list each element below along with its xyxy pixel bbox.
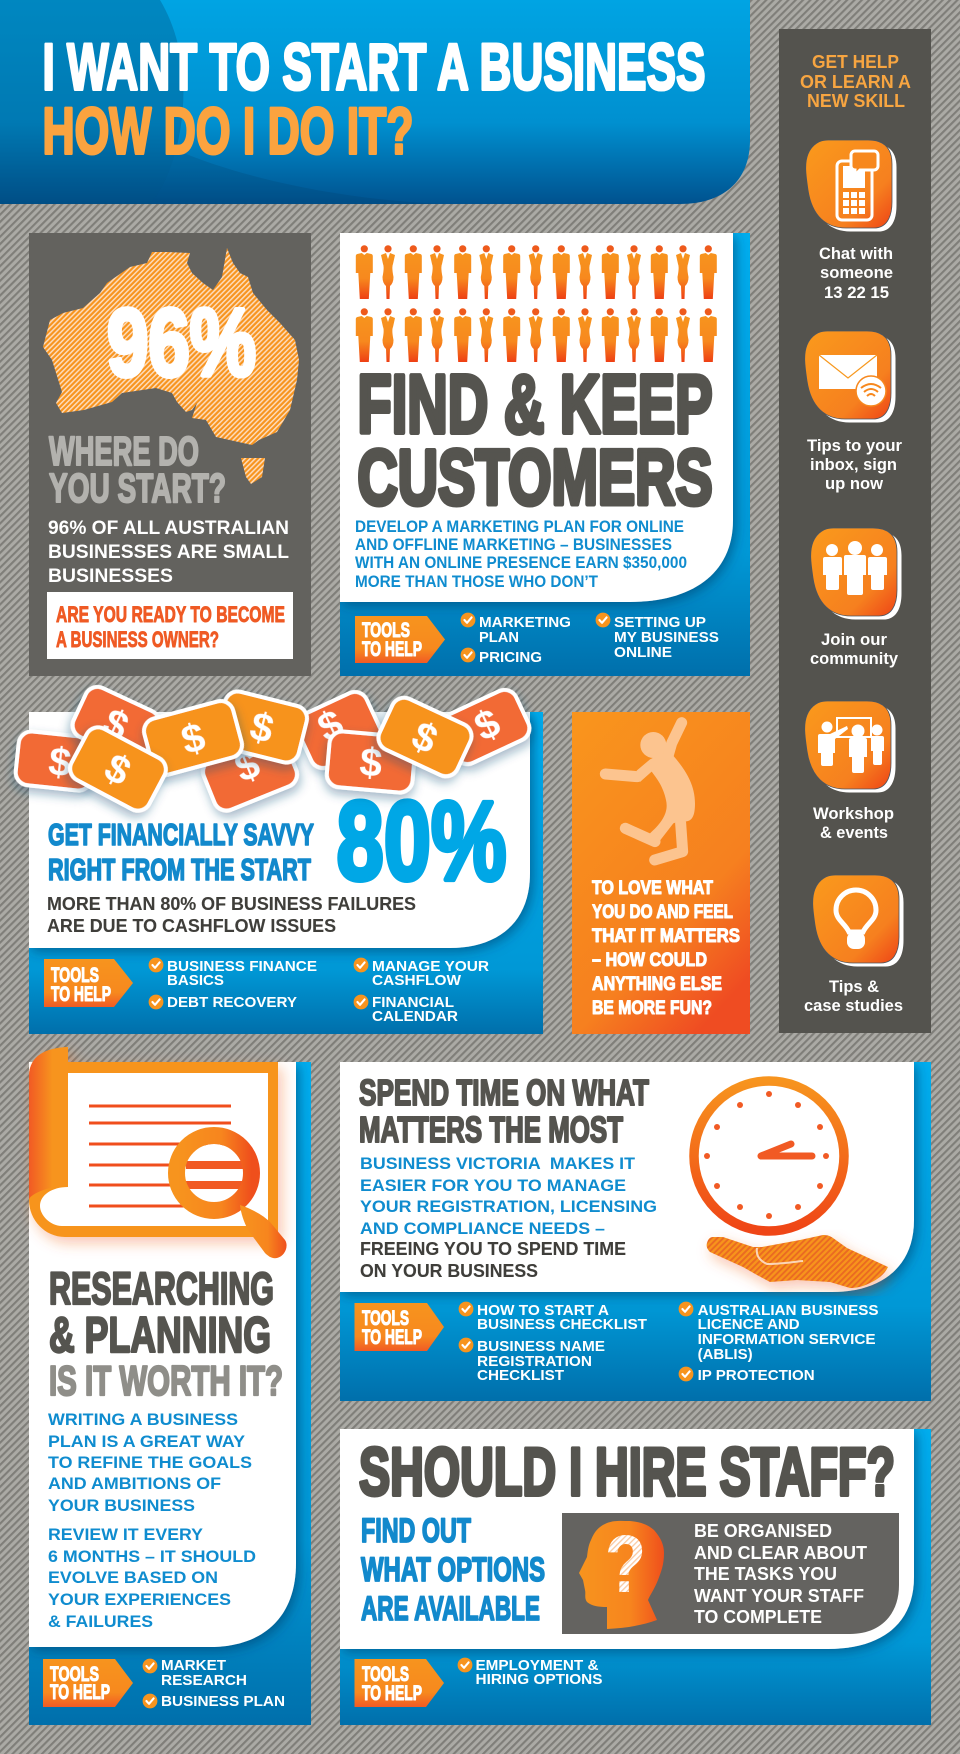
callout: ready to become a business owner: A BUSINESS OWNER? xyxy=(56,627,219,652)
icon: phone chat xyxy=(806,140,896,232)
tools list xyxy=(461,613,719,666)
icon: dollar bills: $ xyxy=(177,715,210,763)
tools list: BASICS xyxy=(167,972,224,989)
title line 2: HOW DO I DO IT? xyxy=(42,94,414,168)
callout: ready to become a business owner: ARE YOU READY TO BECOME xyxy=(56,602,285,627)
text: business victoria: FREEING YOU TO SPEND TIME xyxy=(360,1238,626,1259)
text: marketing plan xyxy=(355,517,687,591)
text: business victoria: EASIER FOR YOU TO MANAGE xyxy=(360,1176,626,1195)
tools list: SETTING UP xyxy=(614,614,706,631)
label: join our community xyxy=(810,630,899,668)
heading: find out what options xyxy=(361,1512,545,1628)
label: tips and case studies: case studies xyxy=(804,996,903,1015)
heading: where do you start: YOU START? xyxy=(49,465,226,511)
text: business victoria: YOUR REGISTRATION, LICENSING xyxy=(360,1197,657,1216)
heading: where do you start xyxy=(49,428,226,511)
tools to help badge xyxy=(44,959,133,1007)
label: workshop and events: & events xyxy=(820,823,888,842)
heading: spend time xyxy=(359,1072,649,1150)
tools list: REGISTRATION xyxy=(477,1353,592,1370)
icon: dollar bills: $ xyxy=(358,740,384,786)
label: tips to your inbox: inbox, sign xyxy=(810,455,897,474)
icon: email newsletter xyxy=(805,331,896,422)
sidebar: get help or learn a new skill xyxy=(779,29,931,1033)
label: workshop and events: Workshop xyxy=(813,804,894,823)
tools list: EMPLOYMENT & xyxy=(476,1657,599,1674)
icon: document scroll with magnifier xyxy=(29,1047,287,1258)
tools list xyxy=(149,958,489,1025)
tools list: ONLINE xyxy=(614,644,672,661)
text: writing a business plan: & FAILURES xyxy=(48,1612,153,1631)
text: marketing plan: AND OFFLINE MARKETING – BUSINESSES xyxy=(355,535,672,554)
text: business victoria: BUSINESS VICTORIA MAKES IT xyxy=(360,1154,636,1173)
text: marketing plan: MORE THAN THOSE WHO DON’T xyxy=(355,572,599,591)
header banner xyxy=(0,0,750,204)
text: cashflow issues: MORE THAN 80% OF BUSINESS FAILURES xyxy=(47,893,416,914)
callout: be organised xyxy=(562,1513,899,1634)
icon: dollar bills: $ xyxy=(47,739,73,786)
icon: open hand xyxy=(707,1235,888,1288)
people icons xyxy=(356,245,717,362)
tools list: BUSINESS PLAN xyxy=(161,1693,285,1710)
tools list: BUSINESS NAME xyxy=(477,1338,605,1355)
tools to help badge xyxy=(355,616,445,663)
heading: researching and planning xyxy=(49,1263,283,1404)
text: writing a business plan: YOUR BUSINESS xyxy=(48,1496,195,1515)
tools list: CHECKLIST xyxy=(477,1367,564,1384)
tools list xyxy=(459,1302,879,1384)
heading: researching and planning: & PLANNING xyxy=(49,1307,271,1363)
text: small business statistic: 96% OF ALL AUSTRALIAN xyxy=(48,518,289,539)
tools list: (ABLIS) xyxy=(698,1346,753,1363)
heading: financially savvy: RIGHT FROM THE START xyxy=(48,852,311,887)
label: tips to your inbox: Tips to your xyxy=(807,436,902,455)
tools list: HIRING OPTIONS xyxy=(476,1671,602,1688)
sidebar heading xyxy=(800,52,911,111)
text: cashflow issues: ARE DUE TO CASHFLOW ISSUES xyxy=(47,915,336,936)
tools to help badge: TOOLS xyxy=(362,1663,409,1686)
label: chat with someone: 13 22 15 xyxy=(824,283,889,302)
icon: dollar bills: $ xyxy=(405,713,444,763)
text: writing a business plan: YOUR EXPERIENCES xyxy=(48,1590,231,1609)
text: be organised: WANT YOUR STAFF xyxy=(694,1585,864,1606)
panel: researching and planning xyxy=(29,1047,311,1725)
icon: light bulb xyxy=(813,875,904,966)
label: tips and case studies: Tips & xyxy=(829,977,879,996)
text: writing a business plan: EVOLVE BASED ON xyxy=(48,1568,218,1587)
icon: dollar bills: $ xyxy=(311,702,350,751)
text: writing a business plan: TO REFINE THE GOALS xyxy=(48,1453,252,1472)
tools list: DEBT RECOVERY xyxy=(167,994,297,1011)
heading: researching and planning: IS IT WORTH IT? xyxy=(49,1357,283,1404)
text: writing a business plan: PLAN IS A GREAT WAY xyxy=(48,1432,246,1451)
tools to help badge: TOOLS xyxy=(50,1663,99,1686)
icon: head with question mark: ? xyxy=(605,1519,646,1610)
text: business victoria: ON YOUR BUSINESS xyxy=(360,1260,538,1281)
label: join our community: Join our xyxy=(821,630,887,649)
tools to help badge: TO HELP xyxy=(362,638,422,661)
tools list: AUSTRALIAN BUSINESS xyxy=(698,1302,879,1319)
label: tips to your inbox: up now xyxy=(825,474,884,493)
icon: dollar bills: $ xyxy=(229,742,266,791)
panel: where do you start xyxy=(29,233,311,676)
text: love what you do: YOU DO AND FEEL xyxy=(592,901,733,923)
icon: clock xyxy=(694,1081,844,1231)
tools to help badge: TO HELP xyxy=(362,1326,422,1349)
text: business victoria xyxy=(360,1154,657,1281)
sidebar heading: NEW SKILL xyxy=(807,91,905,111)
sidebar heading: GET HELP xyxy=(812,52,899,72)
tools list: MARKET xyxy=(161,1657,226,1674)
heading: find and keep customers xyxy=(358,358,712,521)
icon: dollar bills: $ xyxy=(246,704,278,752)
heading: spend time: SPEND TIME ON WHAT xyxy=(359,1072,649,1113)
heading: find and keep customers: CUSTOMERS xyxy=(358,433,712,521)
label: workshop and events xyxy=(813,804,894,842)
map of Australia xyxy=(43,248,299,484)
heading: find out what options: FIND OUT xyxy=(361,1512,471,1550)
heading: spend time: MATTERS THE MOST xyxy=(359,1109,623,1150)
icon: workshop xyxy=(805,701,896,792)
80% figure: 80% xyxy=(336,778,506,904)
tools list: HOW TO START A xyxy=(477,1302,609,1319)
text: cashflow issues xyxy=(47,893,416,936)
tools list xyxy=(458,1657,602,1688)
text: small business statistic: BUSINESSES ARE SMALL xyxy=(48,542,289,563)
tools to help badge xyxy=(43,1659,133,1707)
text: marketing plan: DEVELOP A MARKETING PLAN FOR ONLINE xyxy=(355,517,684,536)
tools list: IP PROTECTION xyxy=(698,1367,815,1384)
text: small business statistic xyxy=(48,518,289,587)
text: love what you do: ANYTHING ELSE xyxy=(592,973,722,995)
text: love what you do: THAT IT MATTERS xyxy=(592,925,740,947)
tools to help badge: TOOLS xyxy=(362,1307,409,1330)
text: be organised: BE ORGANISED xyxy=(694,1520,832,1541)
heading: financially savvy: GET FINANCIALLY SAVVY xyxy=(48,817,314,852)
panel: love what you do xyxy=(572,712,750,1034)
tools list: LICENCE AND xyxy=(698,1316,800,1333)
tools list: RESEARCH xyxy=(161,1672,247,1689)
text: love what you do xyxy=(592,877,740,1019)
label: chat with someone: someone xyxy=(820,263,893,282)
icon: dollar bills: $ xyxy=(96,700,135,750)
heading: find and keep customers: FIND & KEEP xyxy=(358,358,712,450)
tools list: CALENDAR xyxy=(372,1008,458,1025)
text: writing a business plan xyxy=(48,1410,256,1631)
icon: dollar bills xyxy=(14,683,534,815)
heading: researching and planning: RESEARCHING xyxy=(49,1263,274,1314)
tools list: MY BUSINESS xyxy=(614,629,719,646)
icon: dollar bills: $ xyxy=(468,701,507,750)
text: be organised: THE TASKS YOU xyxy=(694,1563,837,1584)
tools list: MARKETING xyxy=(479,614,571,631)
tools list: BUSINESS CHECKLIST xyxy=(477,1316,647,1333)
label: chat with someone: Chat with xyxy=(819,244,893,263)
text: love what you do: BE MORE FUN? xyxy=(592,997,712,1019)
icon: head with question mark xyxy=(579,1519,664,1629)
icon: community xyxy=(811,528,902,620)
heading: where do you start: WHERE DO xyxy=(49,428,199,474)
tools to help badge: TO HELP xyxy=(362,1682,422,1705)
text: be organised xyxy=(694,1520,868,1627)
label: tips and case studies xyxy=(804,977,903,1015)
panel: should I hire staff xyxy=(340,1429,931,1725)
tools to help badge: TOOLS xyxy=(362,619,410,642)
text: be organised: TO COMPLETE xyxy=(694,1606,822,1627)
callout: ready to become a business owner xyxy=(47,592,293,659)
tools to help badge xyxy=(354,1303,444,1351)
tools list: PLAN xyxy=(479,629,519,646)
text: be organised: AND CLEAR ABOUT xyxy=(694,1542,868,1563)
text: writing a business plan: REVIEW IT EVERY xyxy=(48,1525,204,1544)
text: business victoria: AND COMPLIANCE NEEDS – xyxy=(360,1219,605,1238)
tools list: PRICING xyxy=(479,649,542,666)
text: small business statistic: BUSINESSES xyxy=(48,566,173,587)
heading: find out what options: ARE AVAILABLE xyxy=(361,1590,540,1628)
tools list: MANAGE YOUR xyxy=(372,958,489,975)
tools list: BUSINESS FINANCE xyxy=(167,958,317,975)
tools list: CASHFLOW xyxy=(372,972,462,989)
text: love what you do: – HOW COULD xyxy=(592,949,707,971)
tools to help badge xyxy=(354,1659,444,1707)
heading: find out what options: WHAT OPTIONS xyxy=(361,1551,545,1589)
tools list: FINANCIAL xyxy=(372,994,454,1011)
panel: get financially savvy xyxy=(14,683,543,1034)
icon: jumping figure xyxy=(605,723,695,860)
text: love what you do: TO LOVE WHAT xyxy=(592,877,713,899)
sidebar heading: OR LEARN A xyxy=(800,72,911,92)
heading: financially savvy xyxy=(48,817,314,887)
tools to help badge: TO HELP xyxy=(50,1681,110,1704)
tools to help badge: TO HELP xyxy=(51,983,111,1006)
text: writing a business plan: WRITING A BUSINESS xyxy=(48,1410,238,1429)
panel: find and keep customers xyxy=(340,233,750,676)
text: marketing plan: WITH AN ONLINE PRESENCE EARN $350,000 xyxy=(355,553,687,572)
tools list xyxy=(143,1657,285,1710)
tools to help badge: TOOLS xyxy=(51,964,99,987)
panel: spend time on what matters xyxy=(340,1062,931,1401)
96% figure: 96% xyxy=(107,290,256,396)
label: tips to your inbox xyxy=(807,436,902,493)
label: chat with someone xyxy=(819,244,893,302)
icon: dollar bills: $ xyxy=(97,745,138,795)
label: join our community: community xyxy=(810,649,899,668)
text: writing a business plan: AND AMBITIONS OF xyxy=(48,1474,221,1493)
tools list: INFORMATION SERVICE xyxy=(698,1331,876,1348)
text: writing a business plan: 6 MONTHS – IT SHOULD xyxy=(48,1547,256,1566)
